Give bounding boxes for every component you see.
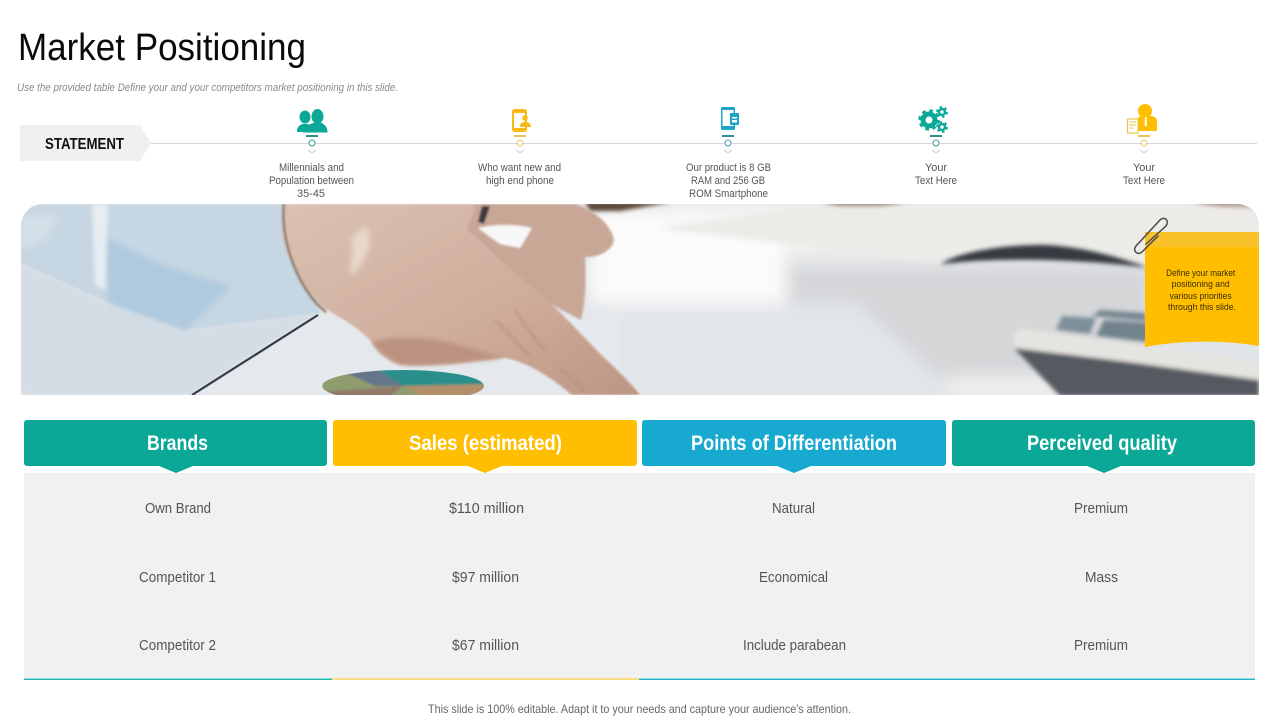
table panel: [24, 420, 1255, 680]
timeline item 3: product: ROM Smartphone: [689, 188, 768, 200]
column: brands: Competitor 2: [139, 637, 216, 654]
subtitle: Use the provided table Define your and your competitors market positioning in this slide.: [17, 82, 398, 94]
timeline item 1: millennials: Millennials and: [279, 162, 344, 174]
column: perceived quality: [952, 420, 1255, 654]
timeline item 5: your text: Your: [1133, 162, 1155, 174]
sticky note callout: [1135, 218, 1259, 347]
statement tag: [20, 125, 151, 161]
column: sales: [333, 420, 637, 654]
column: brands: [24, 420, 327, 654]
hand: [282, 204, 640, 395]
timeline item 3: product: [686, 107, 774, 200]
column: sales: $97 million: [452, 569, 519, 586]
timeline item 4: your text: Your: [925, 162, 947, 174]
column: brands: Own Brand: [145, 500, 211, 517]
column: points of differentiation: [642, 420, 946, 654]
header: sales: [333, 420, 637, 473]
note body: [1145, 232, 1259, 347]
note text: various priorities: [1170, 291, 1232, 302]
header: points of differentiation: Points of Differentiation: [691, 432, 897, 455]
timeline item 2: phone users: high end phone: [486, 175, 554, 187]
footer note: This slide is 100% editable. Adapt it to your needs and capture your audience's attention.: [428, 702, 851, 716]
sleeve and table behind it: [21, 204, 320, 395]
column: perceived quality: Mass: [1085, 569, 1118, 586]
column: sales: $110 million: [449, 500, 524, 517]
calculator: [1013, 310, 1259, 396]
header: points of differentiation: [642, 420, 946, 473]
header: brands: [24, 420, 327, 473]
timeline item 4: your text: Text Here: [915, 175, 957, 187]
column: points of differentiation: Economical: [759, 569, 828, 586]
timeline item 1: millennials: Population between: [269, 175, 354, 187]
timeline item 1: millennials: [269, 109, 357, 200]
column: perceived quality: Premium: [1074, 637, 1128, 654]
timeline item 1: millennials: 35-45: [297, 188, 325, 200]
note text: Define your market: [1166, 268, 1235, 279]
statement tag: STATEMENT: [45, 136, 124, 153]
header: brands: Brands: [147, 432, 208, 455]
timeline item 3: product: Our product is 8 GB: [686, 162, 771, 174]
statement timeline: [20, 104, 1257, 200]
column: points of differentiation: Include parabean: [743, 637, 846, 654]
icon: phone with person: [512, 109, 531, 132]
header: perceived quality: [952, 420, 1255, 473]
timeline item 2: phone users: Who want new and: [478, 162, 561, 174]
title: Market Positioning: [18, 27, 306, 69]
timeline item 5: your text: [1123, 104, 1165, 187]
photo: hand pointing at documents: [21, 202, 1270, 402]
timeline item 5: your text: Text Here: [1123, 175, 1165, 187]
column: sales: $67 million: [452, 637, 519, 654]
column: perceived quality: Premium: [1074, 500, 1128, 517]
icon: two people: [297, 109, 328, 132]
icon: paperclip: [1135, 218, 1167, 253]
header: sales: Sales (estimated): [409, 432, 562, 455]
note text: positioning and: [1172, 279, 1230, 290]
column: brands: Competitor 1: [139, 569, 216, 586]
timeline item 2: phone users: [478, 109, 564, 187]
note text: through this slide.: [1168, 302, 1236, 313]
column: points of differentiation: Natural: [772, 500, 815, 517]
header: perceived quality: Perceived quality: [1027, 432, 1177, 455]
dark background edge at top: [585, 202, 1259, 216]
open book: [656, 206, 1259, 270]
icon: businessman with document: [1128, 104, 1157, 133]
icon: gears: [920, 107, 947, 132]
pie chart on paper: [322, 370, 484, 395]
blurred desk and documents: [586, 204, 1145, 395]
timeline item 3: product: RAM and 256 GB: [691, 175, 765, 187]
icon: phone with sim card: [721, 107, 739, 130]
timeline item 4: your text: [915, 107, 957, 187]
